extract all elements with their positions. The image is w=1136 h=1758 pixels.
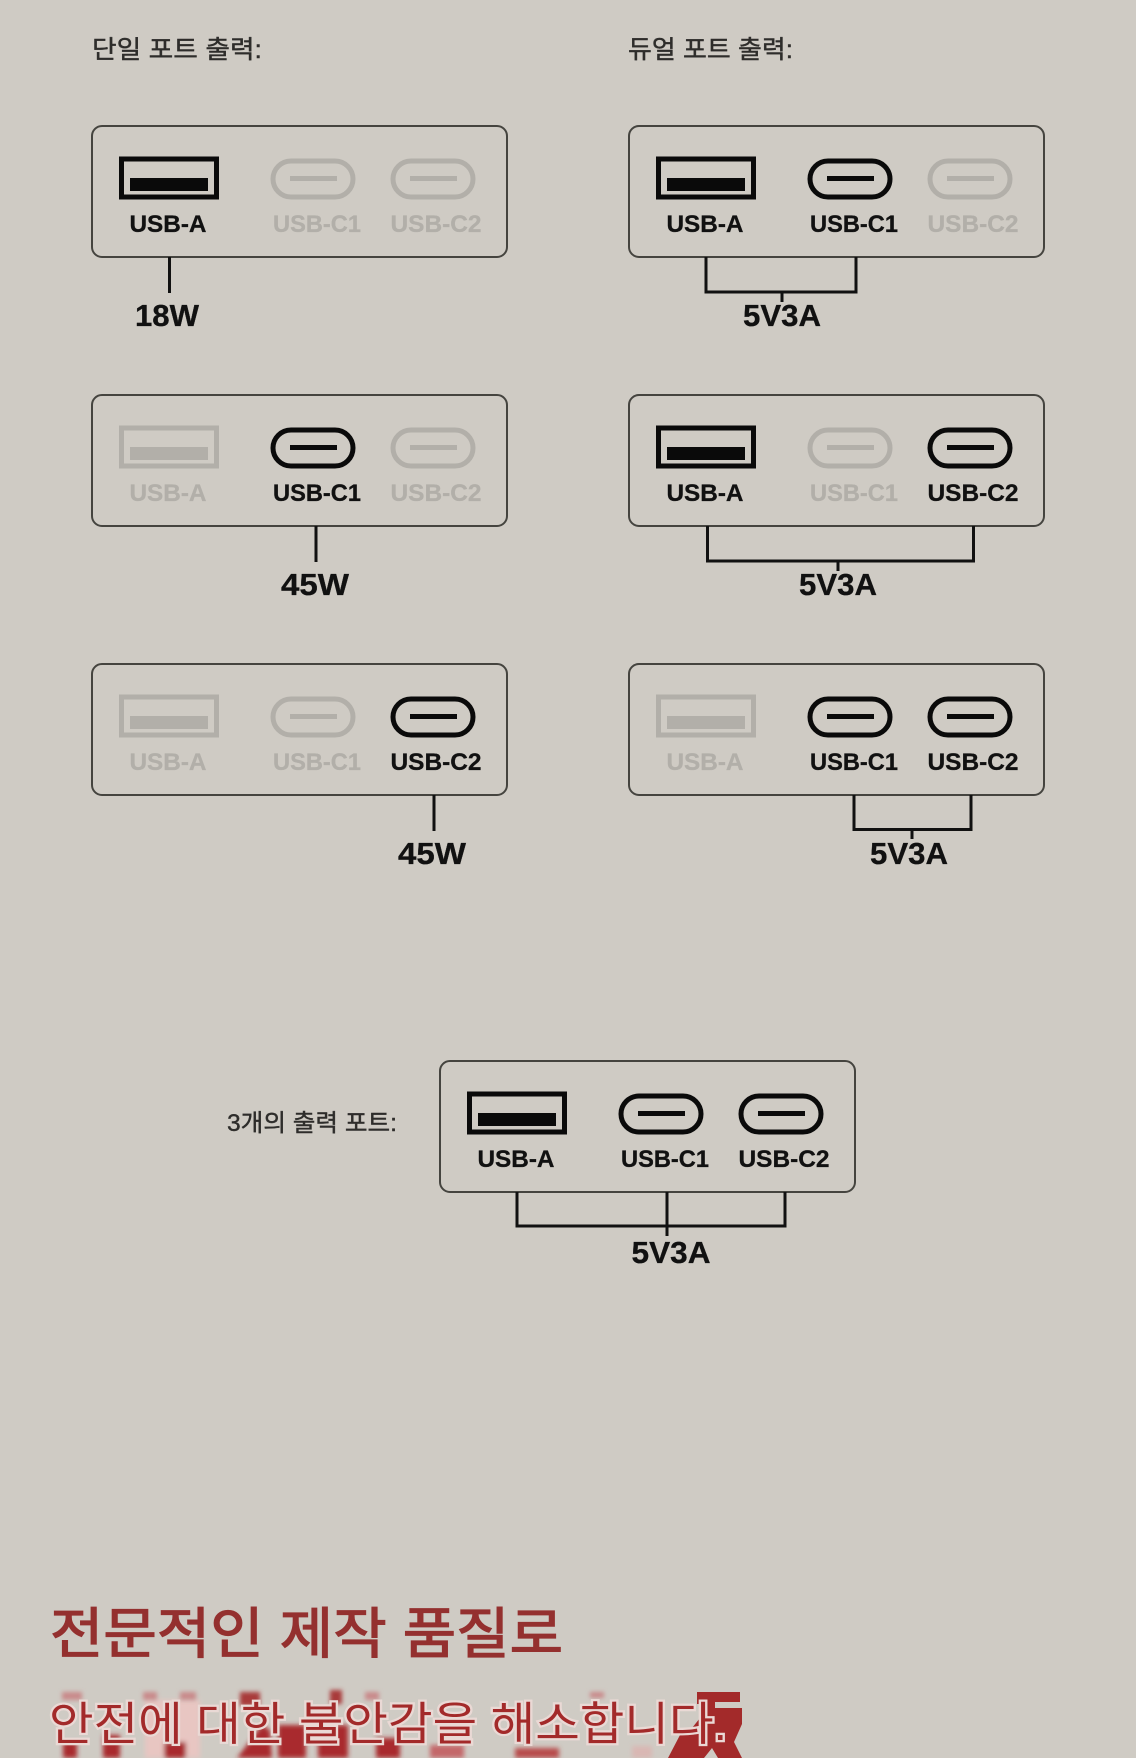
panel: triple output [440, 1061, 855, 1192]
value: 5V3A: 5V3A [799, 567, 877, 602]
value: 5V3A: 5V3A [632, 1235, 710, 1270]
connector: 45W [314, 526, 318, 562]
connector: 18W [168, 257, 171, 293]
icon: USB-C2 active [930, 699, 1010, 735]
panel: single USB-A 18W [92, 126, 507, 257]
label: USB-A: USB-A [666, 211, 744, 238]
value: 45W: 45W [398, 836, 467, 871]
label: USB-C1: USB-C1 [273, 211, 361, 238]
value: 45W: 45W [281, 567, 350, 602]
icon: USB-C1 inactive [273, 699, 353, 735]
icon: USB-C2 inactive [393, 161, 473, 197]
value: 5V3A: 5V3A [870, 836, 948, 871]
label: USB-C2: USB-C2 [390, 749, 482, 776]
icon: USB-C1 active [273, 430, 353, 466]
icon: USB-C2 inactive [930, 161, 1010, 197]
icon: USB-C2 inactive [393, 430, 473, 466]
heading: professional manufacturing quality: 전문적인 제작 품질로 [50, 1603, 563, 1665]
icon: USB-A inactive [122, 428, 216, 466]
icon: USB-C1 inactive [273, 161, 353, 197]
icon: USB-A active [658, 428, 754, 466]
heading: single port output: 단일 포트 출력: [92, 36, 262, 64]
label: USB-C1: USB-C1 [810, 211, 898, 238]
label: USB-C2: USB-C2 [928, 749, 1018, 776]
label: USB-C2: USB-C2 [928, 211, 1018, 238]
label: USB-A: USB-A [666, 749, 744, 776]
label: USB-A: USB-A [130, 480, 206, 507]
connector: 45W [432, 795, 436, 831]
bracket: USB-A + USB-C1 [706, 257, 856, 302]
label: USB-C2: USB-C2 [738, 1146, 830, 1173]
icon: USB-C1 active [810, 699, 890, 735]
icon: USB-A active [658, 159, 754, 197]
heading: dual port output: 듀얼 포트 출력: [628, 36, 793, 64]
icon: USB-A active [122, 159, 216, 197]
panel: dual USB-A + USB-C2 [629, 395, 1044, 526]
bracket: USB-C1 + USB-C2 [854, 795, 971, 839]
label: USB-C1: USB-C1 [810, 749, 898, 776]
background: blurred red artifact text [62, 1690, 742, 1758]
bracket: all three ports [517, 1192, 785, 1236]
panel: single USB-C2 45W [92, 664, 507, 795]
value: 18W: 18W [135, 298, 200, 333]
label: three output ports: 3개의 출력 포트: [227, 1110, 397, 1137]
icon: USB-A inactive [658, 697, 754, 735]
label: USB-A: USB-A [666, 480, 744, 507]
icon fragment: cropped red glyph [668, 1692, 742, 1758]
icon: USB-C1 inactive [810, 430, 890, 466]
label: USB-C1: USB-C1 [273, 749, 361, 776]
icon: USB-C2 active [393, 699, 473, 735]
panel: dual USB-A + USB-C1 [629, 126, 1044, 257]
label: USB-C2: USB-C2 [928, 480, 1018, 507]
icon: USB-C2 active [741, 1096, 821, 1132]
label: USB-A: USB-A [478, 1146, 554, 1173]
label: USB-A: USB-A [130, 211, 206, 238]
panel: dual USB-C1 + USB-C2 [629, 664, 1044, 795]
bracket: USB-A + USB-C2 [708, 526, 974, 571]
label: USB-C2: USB-C2 [390, 211, 482, 238]
icon: USB-C1 active [810, 161, 890, 197]
label: USB-A: USB-A [130, 749, 206, 776]
subheading: removes safety anxiety: 안전에 대한 불안감을 해소합니다. [49, 1698, 727, 1750]
label: USB-C1: USB-C1 [273, 480, 361, 507]
panel: single USB-C1 45W [92, 395, 507, 526]
icon: USB-A inactive [122, 697, 216, 735]
label: USB-C1: USB-C1 [621, 1146, 709, 1173]
icon: USB-A active [470, 1094, 564, 1132]
value: 5V3A: 5V3A [743, 298, 821, 333]
icon: USB-C1 active [621, 1096, 701, 1132]
label: USB-C1: USB-C1 [810, 480, 898, 507]
label: USB-C2: USB-C2 [390, 480, 482, 507]
icon: USB-C2 active [930, 430, 1010, 466]
